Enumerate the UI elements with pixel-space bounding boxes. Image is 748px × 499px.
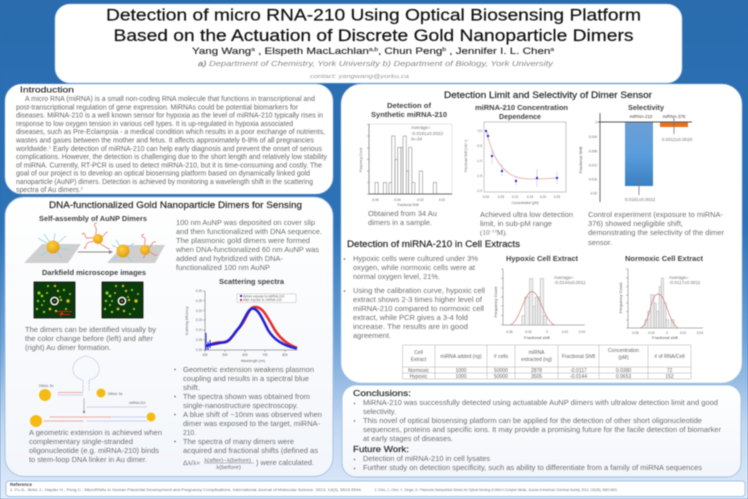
bullet list: cell extracts: agreement. — [353, 331, 391, 340]
chart: hypoxic histogram: Frequency Count — [493, 286, 498, 317]
table: cell extract results: # of RNA/Cell — [654, 354, 685, 360]
title — [106, 6, 641, 45]
chart: concentration dependence: 0.15 — [527, 195, 533, 199]
bullet list: spectra findings: λ(after)−λ(before) — [204, 458, 251, 464]
subheading: hypoxic: Hypoxic Cell Extract — [506, 254, 578, 263]
caption: selectivity — [588, 210, 725, 247]
chart: selectivity: -0.008 — [588, 150, 597, 154]
subheading: concentration dependence: Dependence — [499, 112, 541, 121]
caption: concentration dependence: limit, in sub-pM range — [480, 219, 552, 228]
chart: selectivity: 0 — [595, 120, 597, 124]
chart: hypoxic histogram: -0.02 — [524, 330, 532, 334]
chart: scattering spectra: 600 — [242, 353, 248, 357]
contact: contact: yangwang@yorku.ca — [310, 74, 409, 80]
chart: hypoxic histogram: -0.0144±0.0011 — [554, 280, 586, 285]
chart: scattering spectra: Before expose to miRNA-210 — [243, 294, 285, 298]
bullet list: spectra findings: Δλ/λ= — [183, 461, 201, 467]
chart: concentration dependence: -0.5 — [476, 144, 482, 148]
conclusions list: sequences, proteins and specific ions. It may provide a promising future for the facile detection of biomarker — [363, 425, 722, 434]
diagram: stem-loop linker: Dithiol- 5a — [108, 392, 123, 396]
chart: selectivity: -0.004 — [588, 135, 597, 139]
panel: DNA-functionalized dimers — [5, 197, 333, 476]
chart: normoxic histogram: Frequency Count — [618, 282, 623, 313]
table: cell extract results: # cells — [494, 354, 509, 360]
bullet list: cell extracts: Using the calibration curve, hypoxic cell — [353, 286, 485, 295]
introduction text: 2 — [81, 186, 84, 190]
text: dimers identification — [25, 325, 156, 352]
conclusions list — [354, 398, 722, 443]
caption: concentration dependence: Achieved ultra low detection — [480, 210, 573, 219]
text: dimer preparation: added and hybridized with DNA- — [176, 254, 284, 263]
table: cell extract results: -0.0144 — [570, 374, 587, 380]
text: geometric extension: oligonucleotide (e.g. miRNA-210) binds — [29, 446, 159, 455]
introduction text: diseases, such as Pre-Eclampsia - a medical condition which results in a poor exchange of nutrients, — [16, 129, 325, 136]
text: geometric extension: to stem-loop DNA linker in Au dimer. — [29, 455, 147, 464]
table: cell extract results: miRNA added (ng) — [440, 354, 482, 360]
title: Detection of micro RNA-210 Using Optical Biosensing Platform — [106, 6, 641, 24]
image: darkfield before — [34, 282, 75, 318]
conclusions list: selectivity. — [363, 407, 396, 416]
chart: concentration dependence: -1.5 — [476, 174, 482, 178]
heading: cell extracts: Detection of miRNA-210 in Cell Extracts — [347, 239, 520, 249]
bullet list: spectra findings: Geometric extension weakens plasmon — [183, 365, 314, 374]
table: cell extract results: Concentration — [608, 348, 639, 354]
reference 1: 1. Fu G., Brkic J., Hayder H., Peng C.: MicroRNAs in Human Placental Development and Pregnancy Complications. International Journal of Molecular Science. 2013, 14(3), 5519-5544. — [10, 487, 362, 492]
introduction text: response to low oxygen tension in various cell types. It is up-regulated in hypoxia associated — [16, 121, 293, 128]
authors: , Jennifer I. L. Chen — [446, 46, 550, 56]
chart: selectivity — [578, 113, 693, 202]
table: cell extract results: 50000 — [494, 374, 508, 380]
chart: concentration dependence: 0.10 — [512, 195, 518, 199]
chart: scattering spectra: Scattering Efficiency — [185, 306, 189, 335]
heading: conclusions: Conclusions: — [353, 388, 411, 398]
chart: synthetic histogram: Frequency Count — [359, 148, 363, 172]
text: dimer preparation: when DNA-functionalized 60 nm AuNP was — [175, 245, 319, 254]
image: darkfield after — [102, 282, 143, 318]
chart: scattering spectra: 500 — [222, 353, 228, 357]
chart: selectivity: -0.016 — [588, 178, 597, 182]
text: dimer preparation — [175, 218, 322, 272]
introduction text: A micro RNA (miRNA) is a small non-coding RNA molecule that functions in transcriptional and — [25, 96, 315, 103]
bullet list: spectra findings: 210. — [183, 428, 196, 437]
table: cell extract results — [402, 345, 691, 380]
chart: synthetic histogram — [359, 124, 452, 207]
subheading: normoxic: Normoxic Cell Extract — [625, 254, 703, 263]
panel: detection limit and selectivity — [341, 84, 742, 383]
heading: detection limit: Detection Limit and Selectivity of Dimer Sensor — [444, 90, 652, 100]
chart: selectivity: Fractional Shift — [578, 146, 583, 173]
chart: synthetic histogram: -0.0181±0.0022 — [411, 131, 444, 136]
chart: concentration dependence: Fractional Shift [×10⁻³] — [464, 140, 468, 172]
chart: hypoxic histogram: Fractional shift — [524, 335, 551, 340]
bullet list: spectra findings: The spectra shown was obtained from — [183, 392, 310, 401]
subheading: selectivity: Selectivity — [628, 103, 665, 112]
chart: selectivity: -0.02 — [590, 192, 597, 196]
chart: concentration dependence: 0.25 — [554, 195, 560, 199]
chart: selectivity: 0.0012±0.0020 — [662, 137, 693, 142]
chart: concentration dependence: 0.05 — [498, 195, 504, 199]
conclusions list: MiRNA-210 was successfully detected using actuatable AuNP dimers with ultralow detection limit and good — [363, 398, 718, 407]
table: cell extract results: 50000 — [494, 368, 508, 374]
bullet list: cell extracts: Hypoxic cells were cultured under 3% — [353, 254, 479, 263]
panel: introduction — [5, 84, 333, 194]
affiliations: a) Department of Chemistry, York University b) Department of Biology, York University — [198, 59, 554, 68]
chart: scattering spectra: Wavelength (nm) — [241, 359, 265, 363]
chart: normoxic histogram: 0.02 — [680, 331, 686, 335]
chart: selectivity: -0.012 — [588, 164, 597, 168]
table: cell extract results: (pM) — [618, 355, 629, 361]
chart: scattering spectra: 0.30 — [196, 289, 202, 293]
subheading: concentration dependence — [475, 103, 568, 121]
text: dimer preparation: The plasmonic gold dimers were formed — [176, 236, 310, 245]
chart: concentration dependence: Concentration [pM] — [512, 201, 539, 205]
table: cell extract results: Cell — [414, 350, 423, 356]
authors: Yang Wang — [192, 46, 237, 56]
bullet list: cell extracts — [344, 254, 485, 340]
bullet list: cell extracts: increase. The results are in good — [353, 322, 468, 331]
chart: normoxic histogram: -0.06 — [631, 331, 639, 335]
chart: normoxic histogram: Average= — [669, 275, 689, 280]
chart: hypoxic histogram: 0.02 — [562, 330, 568, 334]
chart: synthetic histogram: Fractional Shift — [397, 203, 419, 207]
chart: scattering spectra: 400 — [202, 353, 208, 357]
caption: concentration dependence: M). — [497, 229, 507, 237]
chart: normoxic histogram: Fractional shift — [652, 335, 679, 340]
introduction text: spectra of Au dimers. — [16, 187, 81, 194]
panel: title — [55, 4, 682, 83]
chart: scattering spectra — [185, 289, 297, 363]
subheading: synthetic miRNA: Detection of — [387, 101, 431, 110]
panel: conclusions — [342, 385, 741, 477]
caption: synthetic histogram: dimers in a sample. — [368, 218, 432, 227]
bullet list: spectra findings: A blue shift of ~10nm was observed when — [183, 410, 322, 419]
table: cell extract results: 0.0653 — [616, 374, 631, 380]
chart: scattering spectra: 800 — [282, 353, 288, 357]
heading: DNA-functionalized dimers: DNA-functionalized Gold Nanoparticle Dimers for Sensing — [49, 200, 302, 210]
bullet list: cell extracts: miRNA-210 compared to normoxic cell — [353, 304, 484, 313]
bullet list: cell extracts: extract, while PCR gives a 3-4 fold — [353, 313, 468, 322]
caption: concentration dependence — [480, 210, 573, 237]
text: dimer preparation: 100 nm AuNP was deposited on cover slip — [176, 218, 315, 227]
diagram: stem-loop linker: miRNA-210 — [129, 401, 146, 405]
title: Based on the Actuation of Discrete Gold Nanoparticle Dimers — [114, 27, 634, 45]
chart: scattering spectra: 0.10 — [196, 328, 202, 332]
chart: selectivity: 0.0181±0.0022 — [625, 197, 656, 202]
chart: synthetic histogram: 0.02 — [439, 198, 445, 202]
conclusions list: at early stages of diseases. — [363, 434, 453, 443]
bullet list: spectra findings: coupling and results in a spectral blue — [183, 374, 309, 383]
introduction text: of miRNA. Currently, RT-PCR is used to detect miRNA-210, but it is time-consuming and costly. The — [16, 162, 322, 169]
chart: synthetic histogram: -0.02 — [416, 198, 424, 202]
table: cell extract results: Fractional Shift — [562, 354, 596, 360]
future work list: Further study on detection specificity, such as ability to differentiate from a family of miRNA sequences — [363, 463, 702, 472]
chart: synthetic histogram: Average= — [411, 125, 431, 130]
chart: scattering spectra: 0.15 — [196, 318, 202, 322]
bullet list: cell extracts: normal oxygen level, 21%. — [353, 272, 440, 281]
bullet list: spectra findings: λ(before) — [216, 465, 241, 471]
conclusions list: This novel of optical biosensing platform can be applied for the detection of other short oligonucleotide — [363, 416, 702, 425]
chart: normoxic histogram — [618, 269, 703, 340]
introduction text: post-transcriptional regulation of gene expression. MiRNAs could be potential biomarkers for — [16, 104, 299, 111]
heading: future work: Future Work: — [353, 444, 409, 454]
chart: normoxic histogram: 0 — [666, 331, 668, 335]
chart: concentration dependence: -2.0 — [476, 189, 482, 193]
chart: normoxic histogram: 0.04 — [697, 331, 703, 335]
references heading: Reference — [10, 482, 33, 487]
table: cell extract results: Extract — [411, 357, 427, 363]
table: cell extract results: miRNA — [529, 350, 545, 356]
chart: scattering spectra: 0.25 — [196, 299, 202, 303]
bullet list: cell extracts: oxygen, while normoxic cells were at — [353, 263, 475, 272]
chart: hypoxic histogram: Average= — [554, 275, 574, 280]
caption: synthetic histogram — [368, 209, 437, 227]
diagram: stem-loop linker — [30, 356, 156, 427]
chart: normoxic histogram: -0.02 — [647, 331, 655, 335]
table: cell extract results: 3505 — [531, 374, 542, 380]
chart: concentration dependence — [464, 122, 566, 205]
table: cell extract results: 1000 — [455, 368, 467, 374]
authors: a — [550, 47, 554, 53]
bullet list: cell extracts: extract shows 2-3 times higher level of — [353, 295, 482, 304]
table: cell extract results: Hypoxic — [410, 374, 428, 380]
text: geometric extension: A geometric extension is achieved when — [29, 428, 162, 437]
chart: synthetic histogram: -0.04 — [393, 198, 401, 202]
introduction text: diseases. MiRNA-210 is a well known sensor for hypoxia as the level of miRNA-210 typically rises in — [16, 113, 323, 120]
table: cell extract results: -0.0117 — [570, 368, 587, 374]
bullet list: spectra findings: The spectra of many dimers were — [183, 437, 294, 446]
chart: hypoxic histogram: -0.06 — [505, 330, 513, 334]
authors: , Chun Peng — [378, 46, 443, 56]
text: dimer preparation: and then functionalized with DNA sequence. — [176, 227, 322, 236]
chart: scattering spectra: 700 — [262, 353, 268, 357]
subheading: scattering spectra: Scattering spectra — [219, 277, 285, 286]
reference 2: 2. Chen, J., Chen, Y., Ginger, D.: Plasmonic Nanoparticle Dimers for Optical Sensing of DNA in Complex Media. Journal of American Chemical Society. 2010, 132(28), 9600-9601. — [374, 487, 618, 492]
introduction text: Early detection of miRNA-210 can help early diagnosis and prevent the onset of serious — [51, 146, 323, 153]
chart: hypoxic histogram: 0 — [546, 330, 548, 334]
introduction text: worldwide. — [16, 146, 49, 153]
heading: introduction: Introduction — [20, 84, 74, 94]
caption: selectivity: 376) showed negligible shift, — [588, 219, 683, 228]
bullet list: spectra findings: acquired and fractional shifts (defined as — [183, 446, 318, 455]
future work list — [354, 454, 702, 472]
table: cell extract results: 0.0380 — [616, 368, 631, 374]
subheading: synthetic miRNA: Synthetic miRNA-210 — [371, 110, 447, 119]
introduction text: nanoparticle (AuNP) dimers. Detection is achieved by monitoring a wavelength shift in the scattering — [16, 179, 313, 186]
caption: concentration dependence: (10 — [480, 229, 490, 237]
table: cell extract results: 152 — [665, 374, 674, 380]
chart: concentration dependence: 0.00 — [483, 195, 489, 199]
chart: hypoxic histogram — [493, 269, 586, 340]
bullet list: spectra findings: shift. — [183, 383, 200, 392]
chart: concentration dependence: 0.0 — [478, 129, 482, 133]
chart: normoxic histogram: -0.0117±0.0011 — [669, 280, 701, 285]
panel: references — [6, 481, 745, 496]
table: cell extract results: 2878 — [531, 368, 542, 374]
introduction text: 1 — [49, 144, 52, 149]
authors: a,b — [369, 47, 378, 53]
subheading: concentration dependence: miRNA-210 Concentration — [475, 103, 568, 112]
chart: selectivity: miRNA-376 — [663, 114, 686, 119]
authors: b — [442, 47, 446, 53]
text: dimers identification: The dimers can be identified visually by — [25, 325, 156, 334]
table: cell extract results: 1000 — [455, 374, 467, 380]
bullet list: spectra findings: dimer was exposed to the target, miRNA- — [183, 419, 321, 428]
chart: scattering spectra: 0.05 — [196, 338, 202, 342]
bullet list: spectra findings: ) were calculated. — [256, 458, 314, 467]
text: geometric extension: complementary single-stranded — [29, 437, 133, 446]
chart: scattering spectra: 0.00 — [196, 348, 202, 352]
introduction text: goal of our project is to develop an optical biosensing platform based on dynamically linked gold — [16, 171, 310, 178]
introduction text: complications. However, the detection is challenging due to the short length and relatively low stability — [16, 154, 328, 161]
chart: hypoxic histogram: 0.04 — [579, 330, 585, 334]
table: cell extract results: 72 — [667, 368, 672, 374]
diagram: self-assembly of dimers — [24, 223, 165, 263]
future work list: Detection of miRNA-210 in cell lysates — [363, 454, 490, 463]
diagram: stem-loop linker: Dithiol- 5a — [39, 384, 54, 388]
chart: synthetic histogram: N=34 — [411, 136, 423, 142]
subheading: self-assembly: Self-assembly of AuNP Dimers — [39, 214, 147, 223]
text: geometric extension — [29, 428, 162, 464]
caption: concentration dependence: −13 — [490, 228, 497, 234]
authors: , Elspeth MacLachlan — [255, 46, 369, 56]
chart: scattering spectra: 0.20 — [196, 309, 202, 313]
chart: scattering spectra: After expose to miRNA-210 — [243, 298, 282, 302]
text: dimer preparation: functionalized 100 nm AuNP — [176, 263, 270, 272]
chart: concentration dependence: -1.0 — [476, 159, 482, 163]
chart: concentration dependence: 0.20 — [540, 195, 546, 199]
text: dimers identification: the color change before (left) and after — [25, 334, 154, 343]
introduction text — [15, 96, 328, 194]
caption: synthetic histogram: Obtained from 34 Au — [368, 209, 437, 218]
bullet list: spectra findings: single-nanostructure spectroscopy. — [183, 401, 298, 410]
caption: selectivity: demonstrating the selectivity of the dimer — [588, 228, 725, 237]
authors: a — [251, 47, 255, 53]
chart: selectivity: miRNA-210 — [630, 114, 653, 119]
introduction text: wastes and gases between the mother and fetus. It affects approximately 6-8% of all pregnancies — [15, 138, 315, 144]
subheading: synthetic miRNA — [371, 101, 447, 119]
subheading: darkfield images: Darkfield microscope images — [42, 268, 146, 277]
chart: synthetic histogram: -0.06 — [371, 198, 379, 202]
table: cell extract results: Normoxic — [408, 368, 430, 374]
text: dimers identification: (right) Au dimer formation. — [25, 343, 111, 352]
caption: selectivity: sensor. — [588, 238, 612, 247]
caption: selectivity: Control experiment (exposure to miRNA- — [588, 210, 724, 219]
table: cell extract results: extracted (ng) — [521, 357, 552, 363]
bullet list: spectra findings — [174, 365, 322, 471]
